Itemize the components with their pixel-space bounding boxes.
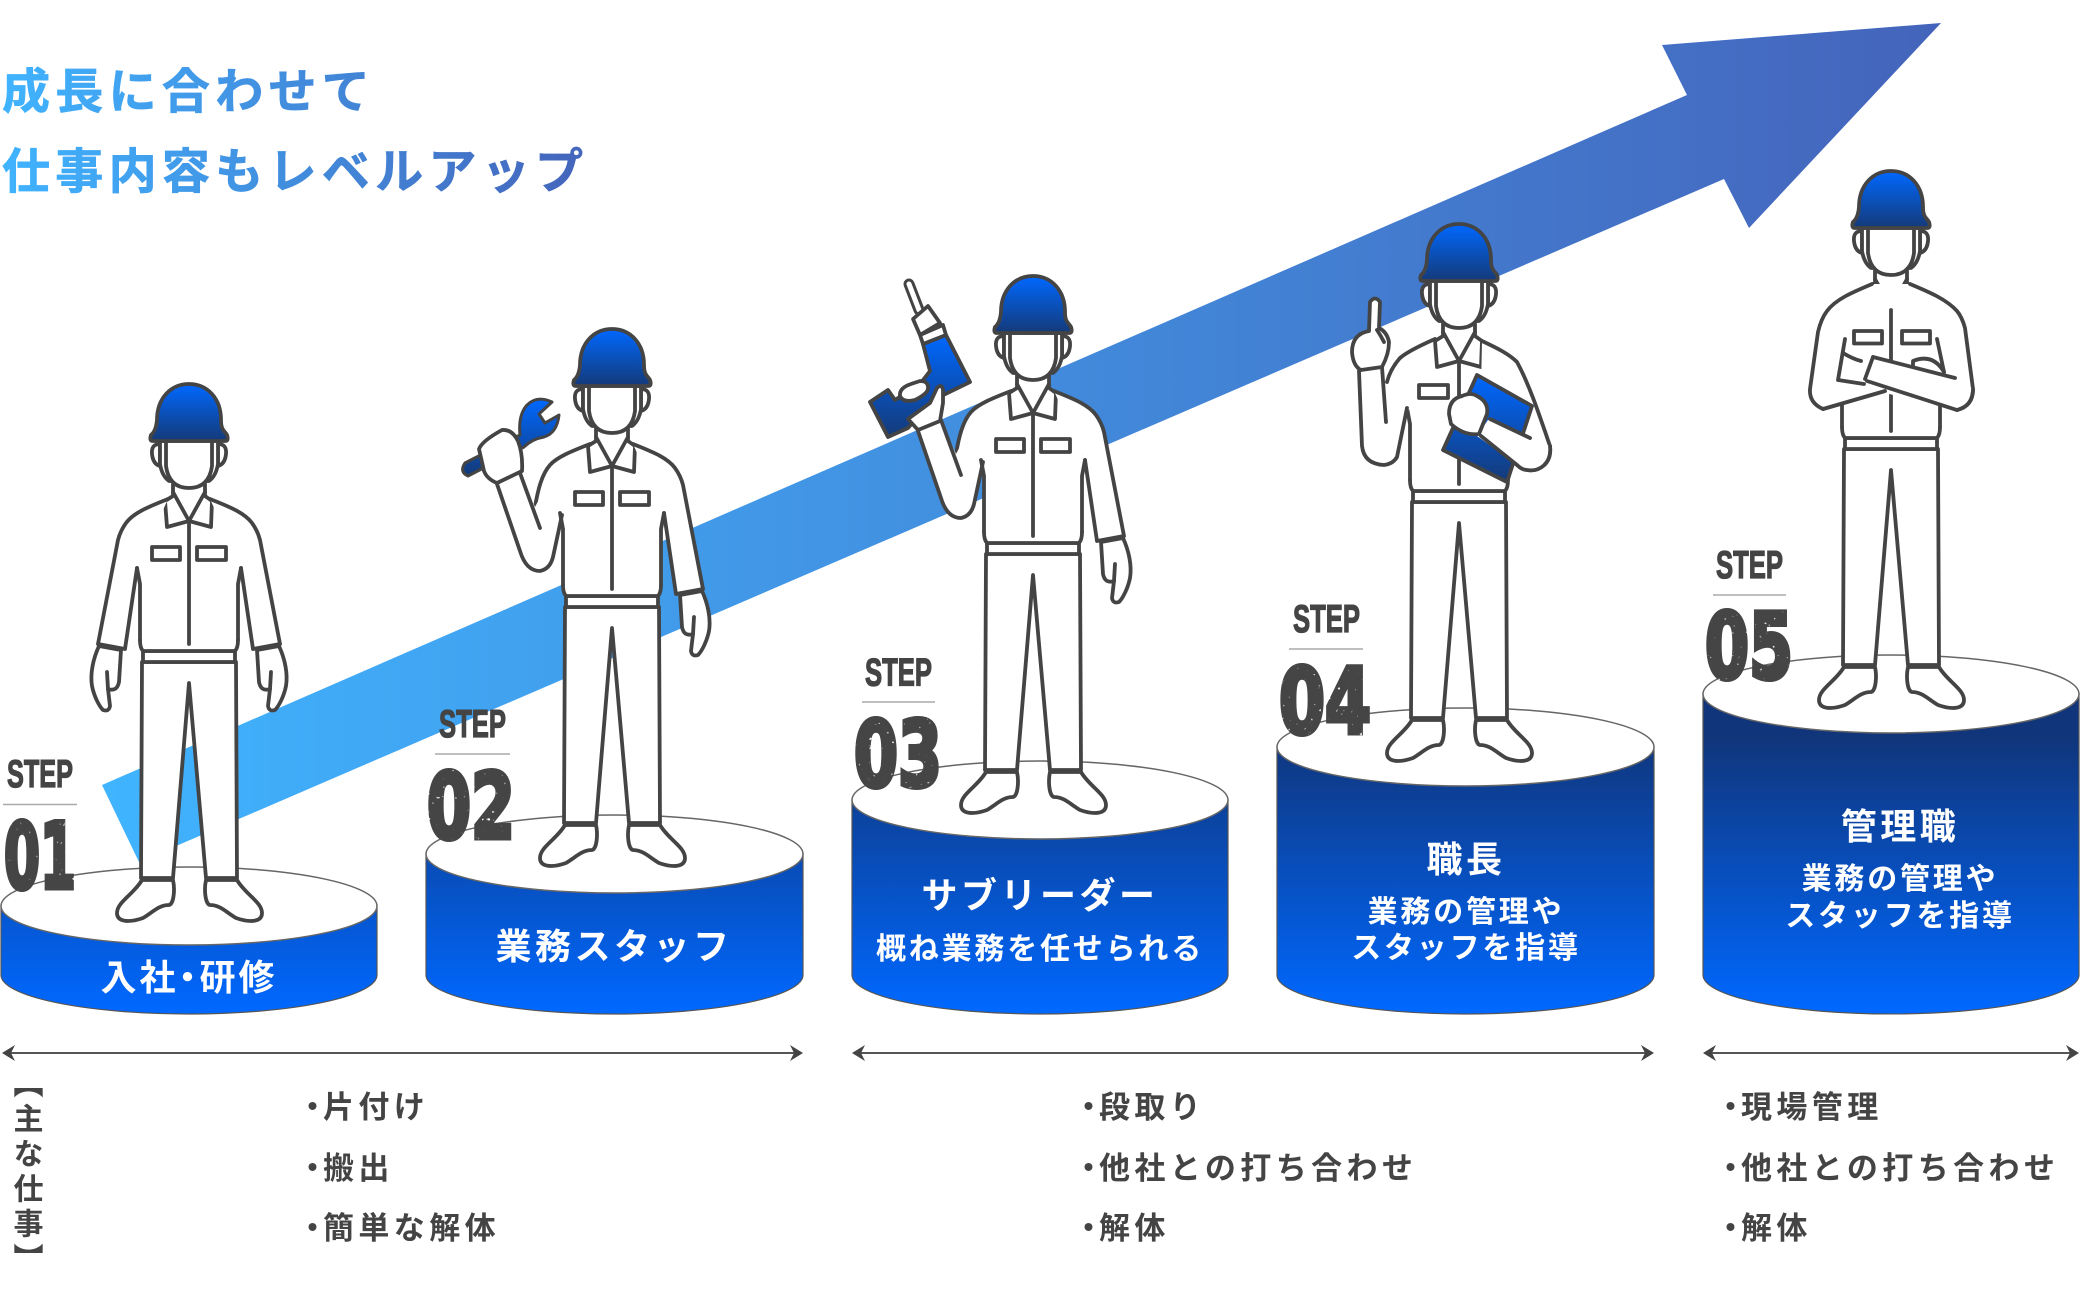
text block: duties steps 01-02: 搬出	[323, 1151, 394, 1186]
panel: pedestal step 03	[852, 761, 1228, 1014]
text block: duties step 05: 解体	[1741, 1211, 1812, 1246]
panel: pedestal step 05: 管理職	[1841, 806, 1959, 847]
step label 05: 05	[1705, 595, 1793, 700]
step label 05	[1705, 544, 1793, 700]
text block: duties step 05: 現場管理	[1741, 1090, 1883, 1125]
panel: pedestal step 01	[1, 867, 377, 1014]
text block: duties steps 01-02: ・	[297, 1211, 332, 1246]
panel: pedestal step 05: 業務の管理や	[1802, 863, 1998, 896]
panel: pedestal step 04: スタッフを指導	[1351, 932, 1581, 965]
step label 03	[854, 652, 942, 808]
text block: duties steps 01-02: ・	[297, 1151, 332, 1186]
text block: duties steps 03-04: ・	[1073, 1151, 1108, 1186]
icon: pocket	[1419, 385, 1448, 398]
step label 03: STEP	[865, 652, 932, 694]
step label 02	[427, 703, 515, 860]
panel: pedestal step 03: サブリーダー	[921, 875, 1159, 916]
text block: duties steps 03-04: 他社との打ち合わせ	[1099, 1151, 1417, 1186]
arrow: span steps 01-02	[2, 1045, 803, 1061]
icon: tablet	[1443, 375, 1532, 482]
icon: drill	[870, 284, 970, 437]
text block: duties steps 01-02: 片付け	[323, 1090, 429, 1125]
step label 02: STEP	[439, 703, 506, 746]
title	[2, 66, 588, 199]
step label 03: 03	[854, 703, 942, 808]
text block: duties step 05: 他社との打ち合わせ	[1741, 1151, 2059, 1186]
text block: duties steps 03-04	[1073, 1090, 1417, 1246]
heading: main duties vertical: 【主な仕事】	[8, 1068, 44, 1278]
icon: fist	[479, 430, 522, 483]
icon: wrench	[463, 399, 559, 476]
text block: duties steps 03-04: 段取り	[1099, 1090, 1205, 1125]
step label 04	[1279, 598, 1371, 755]
text block: duties step 05: ・	[1715, 1151, 1750, 1186]
text block: duties steps 03-04: 解体	[1099, 1211, 1170, 1246]
step label 05: STEP	[1716, 544, 1783, 587]
figure: worker step 02 with wrench	[463, 329, 710, 866]
text block: duties steps 01-02: 簡単な解体	[323, 1211, 500, 1246]
figure: worker step 04 with tablet	[1352, 224, 1550, 761]
figure: worker step 05 arms crossed	[1810, 171, 1973, 708]
panel: pedestal step 04	[1277, 708, 1654, 1014]
step label 02: 02	[427, 755, 515, 860]
title: 成長に合わせて	[2, 66, 375, 119]
panel: pedestal step 03: 概ね業務を任せられる	[876, 933, 1204, 966]
step label 01: STEP	[7, 753, 73, 796]
panel: pedestal step 02	[426, 815, 803, 1014]
arrow: span steps 03-04	[852, 1045, 1654, 1061]
panel: pedestal step 05: スタッフを指導	[1785, 900, 2015, 933]
step label 01	[3, 753, 77, 910]
arrow: growth arrow	[102, 23, 1941, 862]
text block: duties steps 03-04: ・	[1073, 1211, 1108, 1246]
text block: duties step 05: ・	[1715, 1090, 1750, 1125]
panel: pedestal step 04: 職長	[1426, 839, 1506, 880]
arrow: span step 05	[1703, 1045, 2079, 1061]
panel: pedestal step 05	[1703, 655, 2079, 1014]
figure: worker step 03 with drill	[870, 276, 1131, 813]
step label 04: STEP	[1293, 598, 1360, 641]
step label 01: 01	[4, 805, 76, 910]
panel: pedestal step 01: 入社・研修	[100, 957, 278, 998]
panel: pedestal step 02: 業務スタッフ	[495, 926, 733, 967]
text block: duties step 05: ・	[1715, 1211, 1750, 1246]
figure: worker step 01 standing	[91, 384, 287, 921]
text block: duties steps 01-02	[297, 1090, 500, 1246]
title: 仕事内容もレベルアップ	[2, 146, 588, 199]
step label 04: 04	[1279, 650, 1371, 755]
text block: duties steps 03-04: ・	[1073, 1090, 1108, 1125]
panel: pedestal step 04: 業務の管理や	[1368, 896, 1564, 929]
text block: duties steps 01-02: ・	[297, 1090, 332, 1125]
text block: duties step 05	[1715, 1090, 2059, 1246]
